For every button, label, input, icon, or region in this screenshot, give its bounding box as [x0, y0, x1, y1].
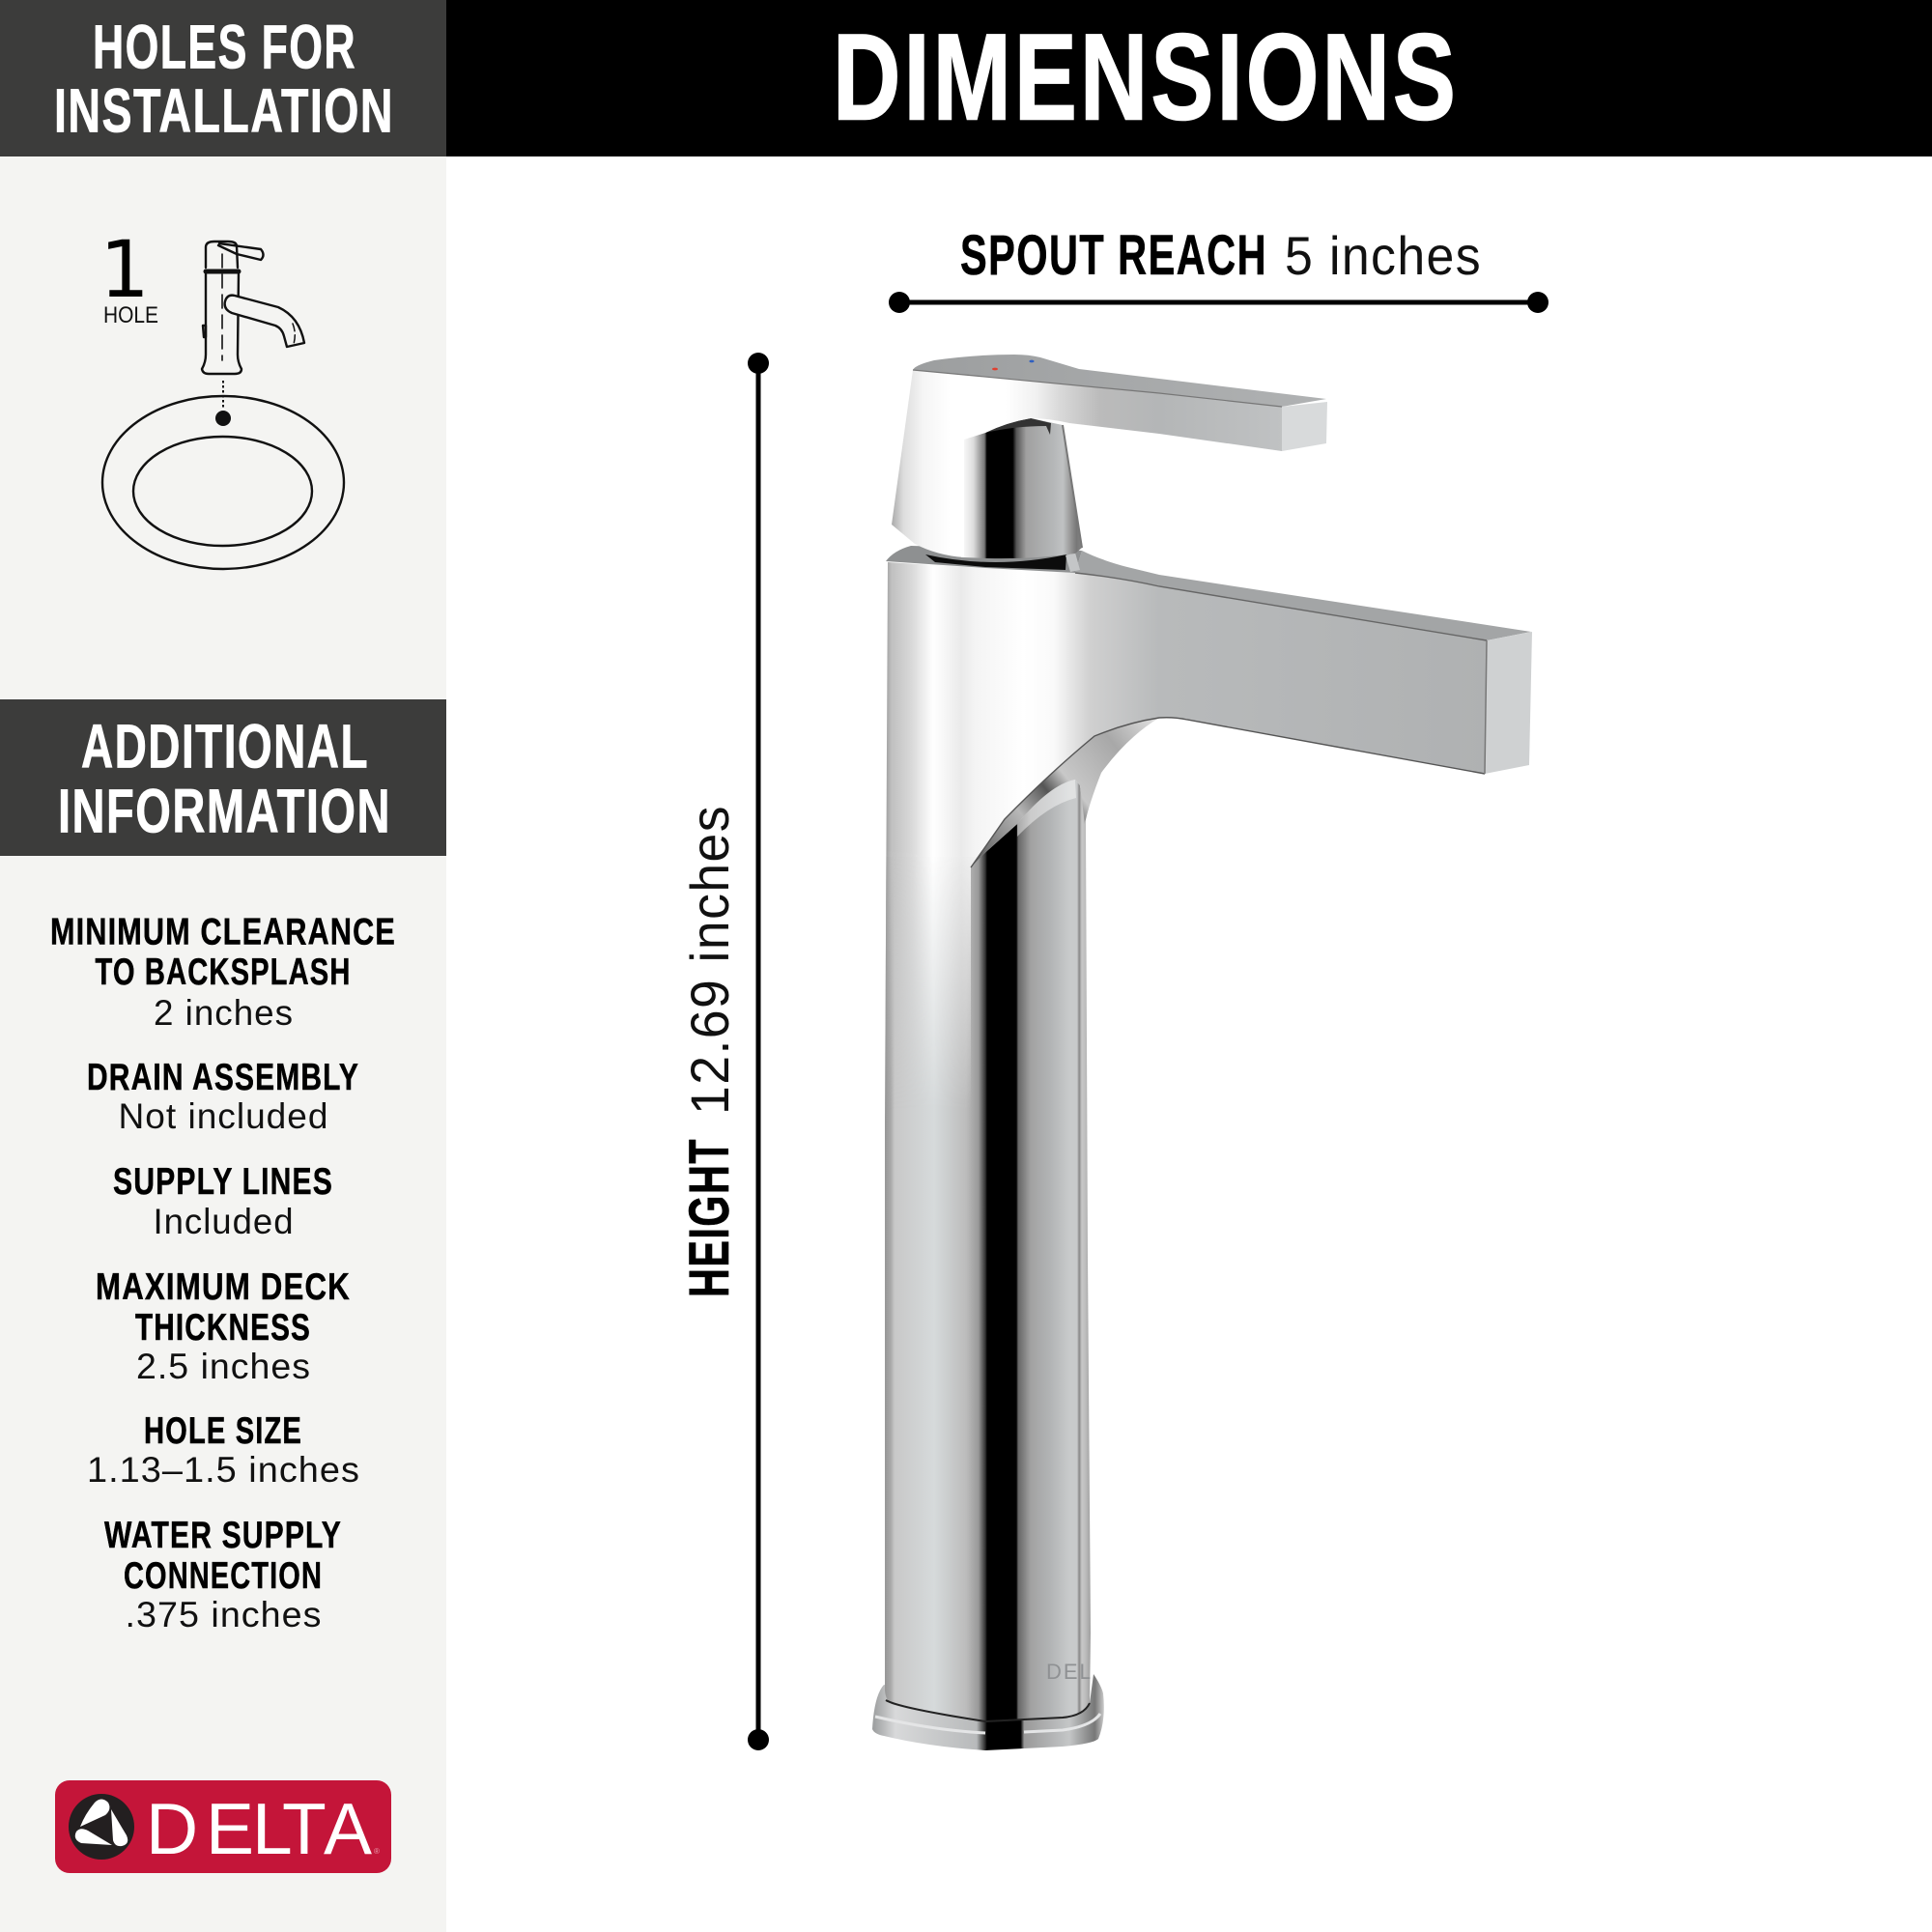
heading panel: additional information — [0, 699, 446, 856]
spec: minimum clearance: MINIMUM CLEARANCE — [50, 912, 396, 952]
spec: maximum deck thickness: THICKNESS — [135, 1307, 311, 1349]
icon: one-hole faucet over sink — [99, 225, 344, 569]
sink basin — [133, 437, 312, 546]
handle end face — [1282, 402, 1327, 451]
spec: minimum clearance: 2 inches — [154, 993, 294, 1033]
body lower edge line — [971, 718, 1485, 867]
collar ring — [925, 554, 1066, 570]
sink hole — [215, 411, 231, 426]
spec: maximum deck thickness: MAXIMUM DECK — [96, 1266, 351, 1308]
handle top facet — [913, 355, 1326, 407]
neck right edge — [1063, 425, 1082, 548]
collar glint — [1065, 553, 1080, 572]
faucet column — [885, 780, 1091, 1721]
sink outer rim — [102, 396, 344, 569]
neck shadow crescent — [985, 418, 1051, 435]
handle neck — [961, 418, 1082, 558]
spout top edge line — [1075, 573, 1487, 640]
spec: supply lines: Included — [153, 1202, 294, 1241]
handle top edge line — [913, 370, 1282, 407]
spec: water supply connection: WATER SUPPLY — [104, 1515, 342, 1556]
spout end face — [1485, 632, 1532, 774]
spec: hole size: 1.13–1.5 inches — [87, 1450, 360, 1490]
heading panel: additional information: INFORMATION — [58, 777, 391, 846]
spout edge highlights — [1485, 640, 1487, 774]
spec: water supply connection: .375 inches — [126, 1595, 323, 1634]
hot marker — [992, 368, 998, 370]
spout top facet — [1075, 551, 1531, 640]
spec: maximum deck thickness — [96, 1266, 351, 1386]
faucet underside curve — [971, 718, 1159, 867]
dotted drop line — [222, 381, 224, 409]
handle lever front — [892, 370, 1282, 557]
cold marker — [1029, 360, 1035, 362]
hole count label: HOLE — [103, 302, 158, 328]
Delta logo: ® — [374, 1847, 380, 1856]
spec: water supply connection — [104, 1515, 342, 1634]
spec: minimum clearance: TO BACKSPLASH — [95, 952, 352, 993]
spec: drain assembly — [87, 1057, 359, 1136]
spec: supply lines: SUPPLY LINES — [113, 1161, 333, 1203]
spec list — [50, 912, 396, 1634]
spout reach dimension: SPOUT REACH — [960, 224, 1267, 287]
height dimension — [678, 353, 769, 1750]
spout reach dimension: 5 inches — [1285, 225, 1482, 286]
body shoulder behind handle — [886, 546, 1082, 573]
spec: hole size: HOLE SIZE — [144, 1410, 302, 1452]
height dimension: 12.69 inches — [679, 805, 740, 1115]
heading panel: additional information: ADDITIONAL — [81, 711, 369, 781]
Delta logo: DELTA — [146, 1788, 372, 1869]
spec: maximum deck thickness: 2.5 inches — [136, 1347, 311, 1386]
header bar: dimensions — [446, 0, 1932, 156]
faucet body and spout — [885, 562, 1487, 1121]
small faucet line drawing — [202, 242, 304, 374]
spec: supply lines — [113, 1161, 333, 1241]
engraved brand text: DELTA — [1046, 1660, 1122, 1684]
faucet base plate — [872, 1674, 1104, 1750]
hole count label: 1 — [99, 225, 150, 316]
spout reach arrow line — [889, 292, 1548, 313]
title: DIMENSIONS — [833, 8, 1459, 145]
spec: water supply connection: CONNECTION — [124, 1555, 323, 1597]
heading panel: holes for installation — [0, 0, 446, 156]
spec: minimum clearance — [50, 912, 396, 1033]
spec: drain assembly: DRAIN ASSEMBLY — [87, 1057, 359, 1098]
height dimension: HEIGHT — [678, 1138, 741, 1297]
sidebar background — [0, 0, 446, 1932]
heading panel: holes for installation: INSTALLATION — [54, 75, 394, 145]
spec: hole size — [87, 1410, 360, 1490]
spout reach dimension — [889, 224, 1548, 313]
faucet product image — [872, 355, 1532, 1750]
height arrow line — [748, 353, 769, 1750]
spec: drain assembly: Not included — [118, 1096, 328, 1136]
heading panel: holes for installation: HOLES FOR — [93, 12, 356, 81]
Delta logo — [55, 1780, 391, 1873]
